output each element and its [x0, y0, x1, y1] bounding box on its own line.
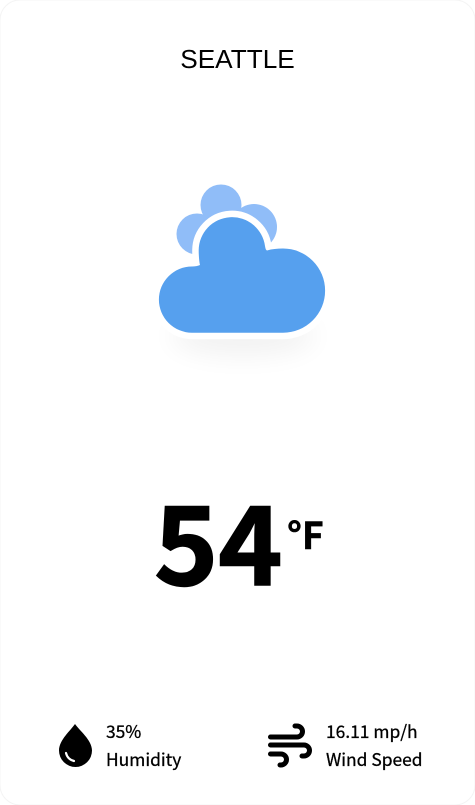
icon: wind — [268, 724, 312, 768]
icon: cloud — [158, 184, 326, 351]
temperature unit: °F — [287, 506, 324, 560]
humidity label: Humidity — [106, 747, 181, 772]
temperature value: 54 — [154, 460, 283, 617]
title: SEATTLE — [180, 44, 295, 74]
wind stat — [268, 719, 423, 772]
humidity stat — [59, 719, 182, 772]
front cloud — [159, 217, 325, 333]
humidity value: 35% — [106, 719, 141, 744]
wind label: Wind Speed — [326, 747, 423, 772]
wind value: 16.11 mp/h — [326, 719, 418, 744]
cloud shadow — [171, 316, 315, 356]
icon: water drop — [59, 724, 92, 767]
temperature — [154, 460, 324, 617]
back cloud — [176, 184, 277, 254]
